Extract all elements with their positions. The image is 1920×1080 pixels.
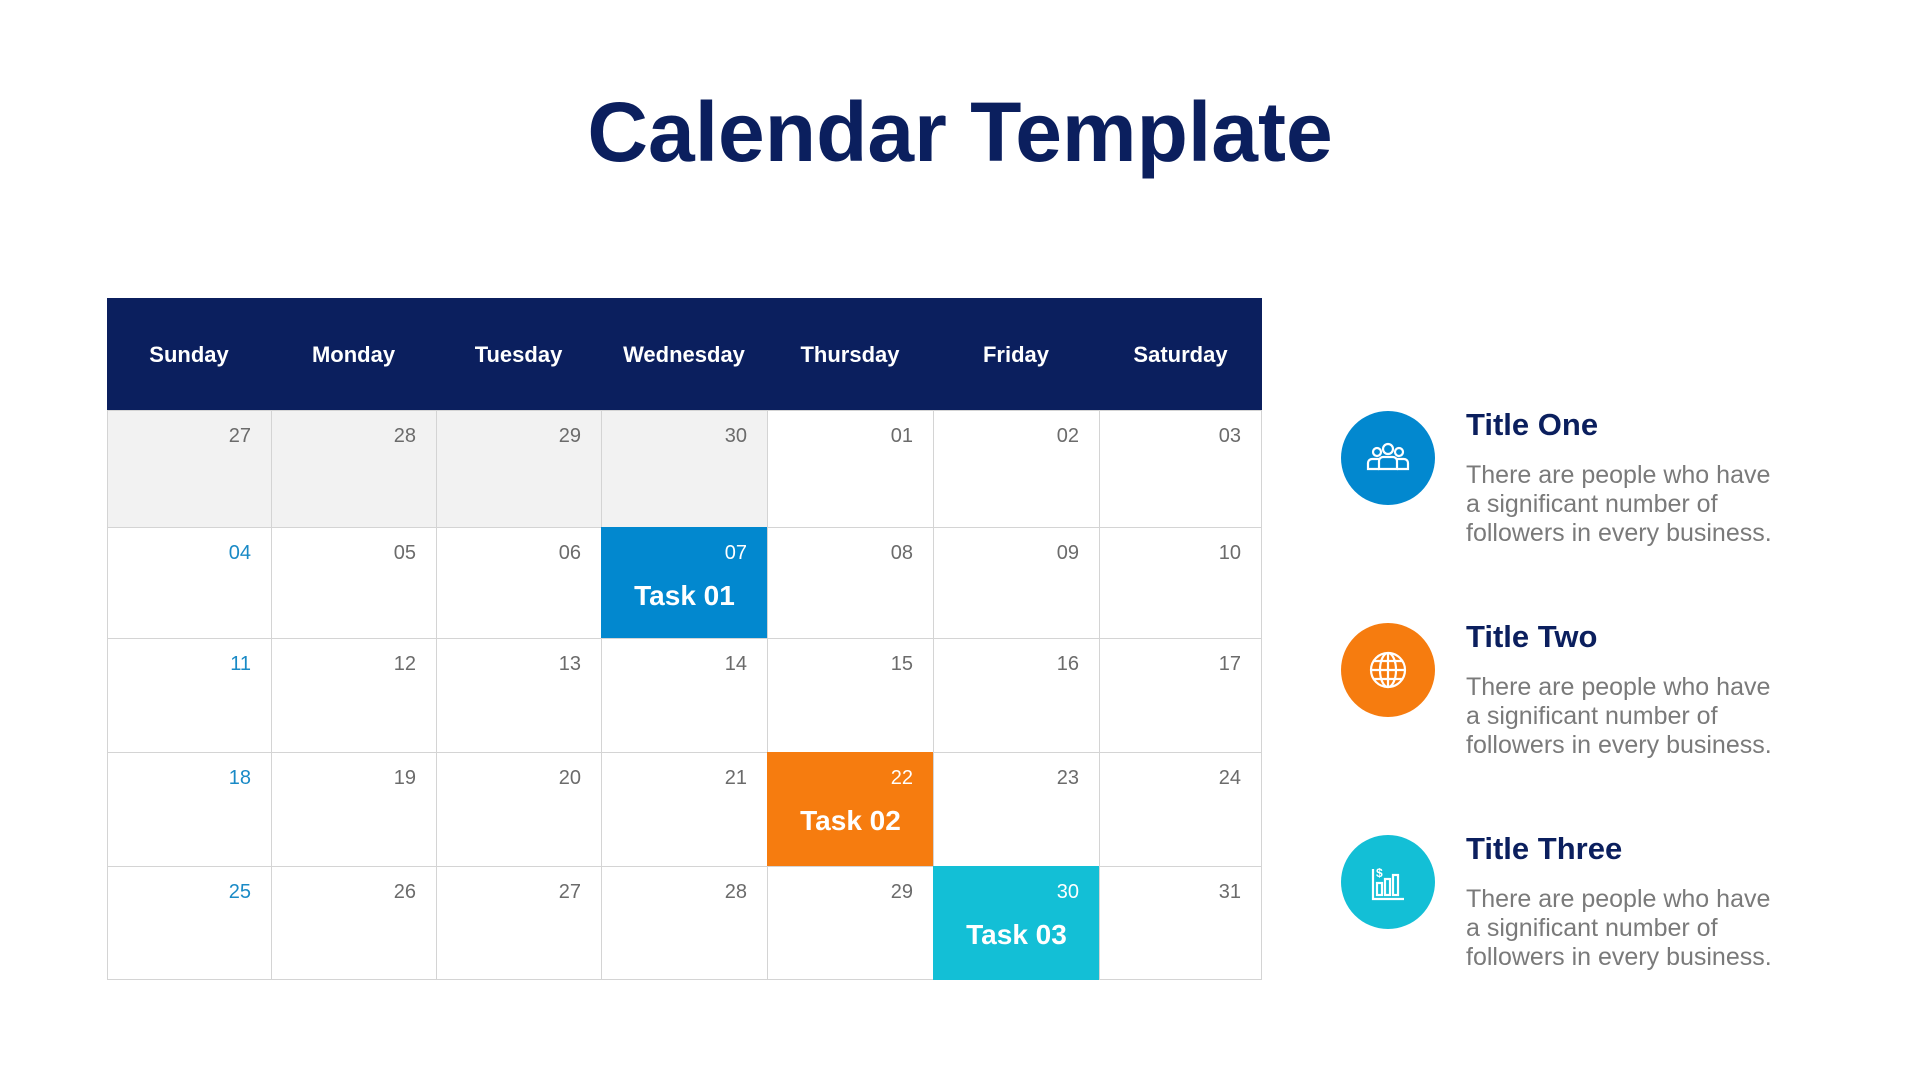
row 2: [107, 527, 272, 639]
calendar: 29: [559, 425, 581, 447]
icon: people: [1341, 411, 1435, 505]
icon: chart: $: [1376, 866, 1383, 880]
calendar: 15: [891, 653, 913, 675]
calendar: 23: [1057, 767, 1079, 789]
calendar: 03: [1219, 425, 1241, 447]
calendar: 28: [725, 881, 747, 903]
calendar: 20: [559, 767, 581, 789]
row 1: 27: [229, 425, 251, 447]
calendar: 09: [1057, 542, 1079, 564]
header row: Tuesday: [475, 342, 562, 367]
calendar: [107, 298, 1262, 980]
header row: Friday: [983, 342, 1049, 367]
header row: [107, 298, 1262, 410]
calendar: 14: [725, 653, 747, 675]
row 3: [107, 638, 272, 753]
task 02: 22: [891, 767, 913, 789]
row 2: 04: [229, 542, 251, 564]
item: title one: [1341, 407, 1772, 547]
title: Calendar Template: [587, 85, 1333, 179]
item: title three: Title Three: [1466, 831, 1622, 866]
calendar: 08: [891, 542, 913, 564]
task 03: [933, 866, 1100, 980]
item: title one: Title One: [1466, 407, 1598, 442]
calendar: 24: [1219, 767, 1241, 789]
row 1: [107, 410, 272, 528]
header row: Saturday: [1133, 342, 1228, 367]
header row: Monday: [312, 342, 395, 367]
row 5: [107, 866, 272, 980]
item: title two: Title Two: [1466, 619, 1597, 654]
task 01: Task 01: [634, 580, 735, 611]
item: title three: [1341, 831, 1772, 971]
task 01: 07: [725, 542, 747, 564]
task 02: Task 02: [800, 805, 901, 836]
calendar: 19: [394, 767, 416, 789]
calendar: 26: [394, 881, 416, 903]
task 02: [767, 752, 934, 867]
calendar: 06: [559, 542, 581, 564]
calendar: 02: [1057, 425, 1079, 447]
header row: Wednesday: [623, 342, 745, 367]
calendar: 10: [1219, 542, 1241, 564]
row 3: 11: [230, 653, 251, 675]
calendar: 29: [891, 881, 913, 903]
icon: globe: [1341, 623, 1435, 717]
row 4: [107, 752, 272, 867]
calendar: 31: [1219, 881, 1241, 903]
icon: chart: [1341, 835, 1435, 929]
calendar: 16: [1057, 653, 1079, 675]
calendar: 13: [559, 653, 581, 675]
item: title two: [1341, 619, 1772, 759]
calendar: 21: [725, 767, 747, 789]
item: title three: There are people who have a significant number of followers in every business.: [1466, 885, 1772, 971]
task 01: [601, 527, 768, 639]
header row: Sunday: [149, 342, 229, 367]
calendar: 17: [1219, 653, 1241, 675]
calendar: 27: [559, 881, 581, 903]
calendar: 01: [891, 425, 913, 447]
item: title two: There are people who have a significant number of followers in every business.: [1466, 673, 1772, 759]
calendar: 28: [394, 425, 416, 447]
header row: Thursday: [800, 342, 900, 367]
calendar: 30: [725, 425, 747, 447]
calendar: 12: [394, 653, 416, 675]
calendar: 05: [394, 542, 416, 564]
task 03: 30: [1057, 881, 1079, 903]
row 4: 18: [229, 767, 251, 789]
task 03: Task 03: [966, 919, 1067, 950]
item: title one: There are people who have a significant number of followers in every business.: [1466, 461, 1772, 547]
row 5: 25: [229, 881, 251, 903]
